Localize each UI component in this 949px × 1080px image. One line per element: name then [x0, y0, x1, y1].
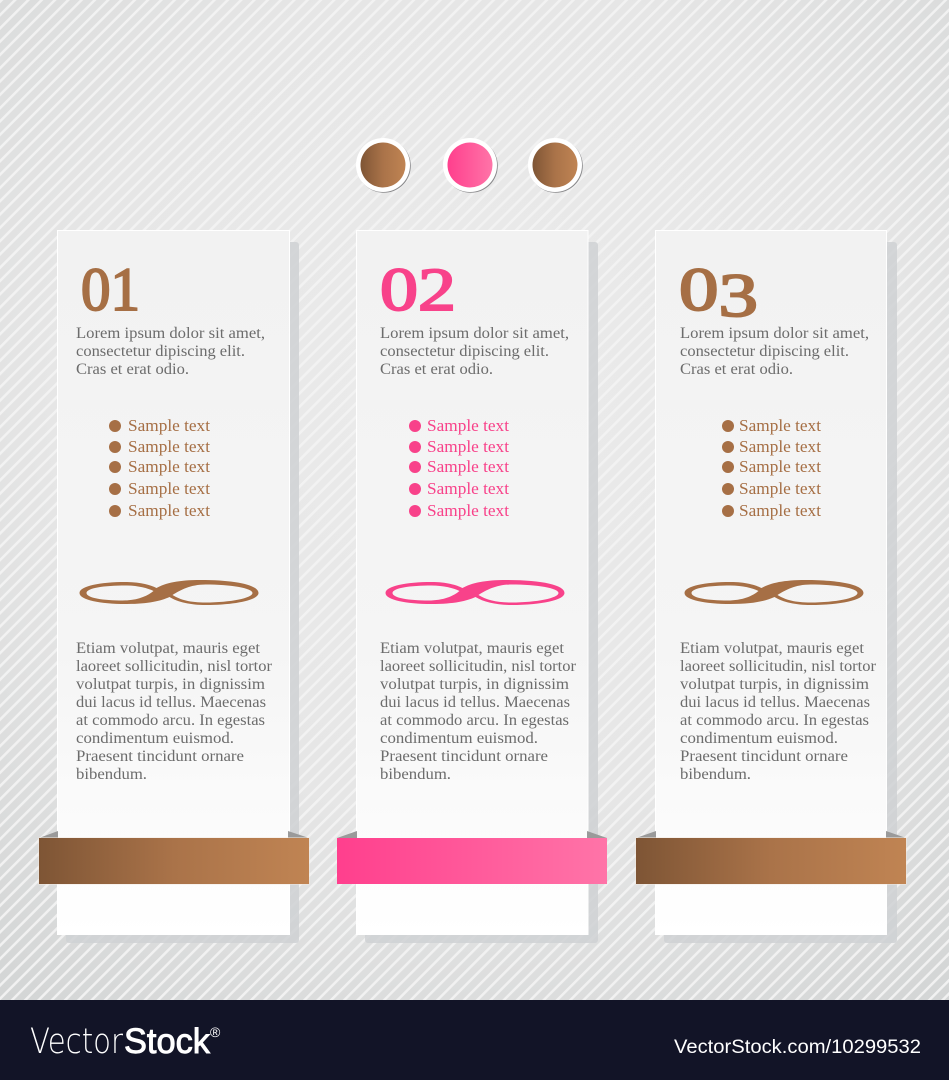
number 03: 3	[718, 263, 758, 330]
bullet list: Sample text	[739, 501, 821, 520]
body text	[680, 640, 877, 783]
body text: Praesent tincidunt ornare	[76, 748, 244, 765]
body text: condimentum euismod.	[380, 730, 538, 747]
intro text: consectetur dipiscing elit.	[76, 343, 245, 360]
dot: brown	[528, 138, 583, 193]
intro text: Lorem ipsum dolor sit amet,	[76, 325, 265, 342]
body text: dui lacus id tellus. Maecenas	[680, 694, 870, 711]
body text: at commodo arcu. In egestas	[76, 712, 265, 729]
intro text	[380, 325, 569, 378]
ribbon	[636, 831, 906, 884]
ribbon	[337, 831, 607, 884]
intro text: Cras et erat odio.	[680, 361, 793, 378]
intro text: Lorem ipsum dolor sit amet,	[380, 325, 569, 342]
icon: infinity ornament	[684, 580, 864, 605]
bullet list: Sample text	[128, 416, 210, 435]
logo: registered mark: ®	[210, 1024, 221, 1040]
body text: Etiam volutpat, mauris eget	[76, 640, 261, 657]
logo: Stock: Stock	[124, 1022, 210, 1061]
body text: condimentum euismod.	[76, 730, 234, 747]
body text	[380, 640, 577, 783]
panel: 02	[337, 230, 607, 943]
body text: laoreet sollicitudin, nisl tortor	[380, 658, 577, 675]
bullet list	[109, 416, 210, 520]
bullet list: Sample text	[128, 457, 210, 476]
intro text: consectetur dipiscing elit.	[380, 343, 549, 360]
body text: laoreet sollicitudin, nisl tortor	[76, 658, 273, 675]
body text: condimentum euismod.	[680, 730, 838, 747]
body text: volutpat turpis, in dignissim	[380, 676, 570, 693]
intro text: Lorem ipsum dolor sit amet,	[680, 325, 869, 342]
number 01: 01	[81, 257, 140, 324]
bullet list: Sample text	[128, 501, 210, 520]
icon: infinity ornament	[80, 580, 258, 605]
bullet list: Sample text	[427, 437, 509, 456]
intro text: Cras et erat odio.	[380, 361, 493, 378]
body text: at commodo arcu. In egestas	[680, 712, 869, 729]
body text: bibendum.	[680, 766, 751, 783]
body text	[76, 640, 273, 783]
bullet list	[409, 416, 509, 520]
bullet list: Sample text	[128, 437, 210, 456]
body text: bibendum.	[380, 766, 451, 783]
body text: dui lacus id tellus. Maecenas	[380, 694, 570, 711]
body text: volutpat turpis, in dignissim	[76, 676, 266, 693]
body text: Praesent tincidunt ornare	[380, 748, 548, 765]
ribbon	[38, 831, 310, 884]
body text: laoreet sollicitudin, nisl tortor	[680, 658, 877, 675]
body text: Etiam volutpat, mauris eget	[680, 640, 865, 657]
bullet list	[722, 416, 821, 520]
body text: Praesent tincidunt ornare	[680, 748, 848, 765]
dot: brown	[356, 138, 411, 193]
logo: VectorStock: Vector	[30, 1022, 124, 1062]
indicator dots	[356, 138, 583, 193]
icon: infinity ornament	[386, 580, 564, 605]
number 02: 02	[380, 257, 456, 324]
body text: bibendum.	[76, 766, 147, 783]
bullet list: Sample text	[128, 479, 210, 498]
bullet list: Sample text	[427, 457, 509, 476]
footer bar	[0, 1000, 949, 1080]
intro text: Cras et erat odio.	[76, 361, 189, 378]
bullet list: Sample text	[427, 479, 509, 498]
dot: pink	[443, 138, 498, 193]
bullet list: Sample text	[739, 416, 821, 435]
number 03: 0	[679, 257, 710, 324]
bullet list: Sample text	[427, 416, 509, 435]
body text: volutpat turpis, in dignissim	[680, 676, 870, 693]
body text: Etiam volutpat, mauris eget	[380, 640, 565, 657]
panel: 01	[38, 230, 310, 943]
panel: 03	[636, 230, 906, 943]
intro text: consectetur dipiscing elit.	[680, 343, 849, 360]
intro text	[76, 325, 265, 378]
body text: at commodo arcu. In egestas	[380, 712, 569, 729]
bullet list: Sample text	[739, 457, 821, 476]
body text: dui lacus id tellus. Maecenas	[76, 694, 266, 711]
bullet list: Sample text	[739, 479, 821, 498]
bullet list: Sample text	[739, 437, 821, 456]
intro text	[680, 325, 869, 378]
bullet list: Sample text	[427, 501, 509, 520]
image id: VectorStock.com/10299532	[674, 1036, 921, 1058]
